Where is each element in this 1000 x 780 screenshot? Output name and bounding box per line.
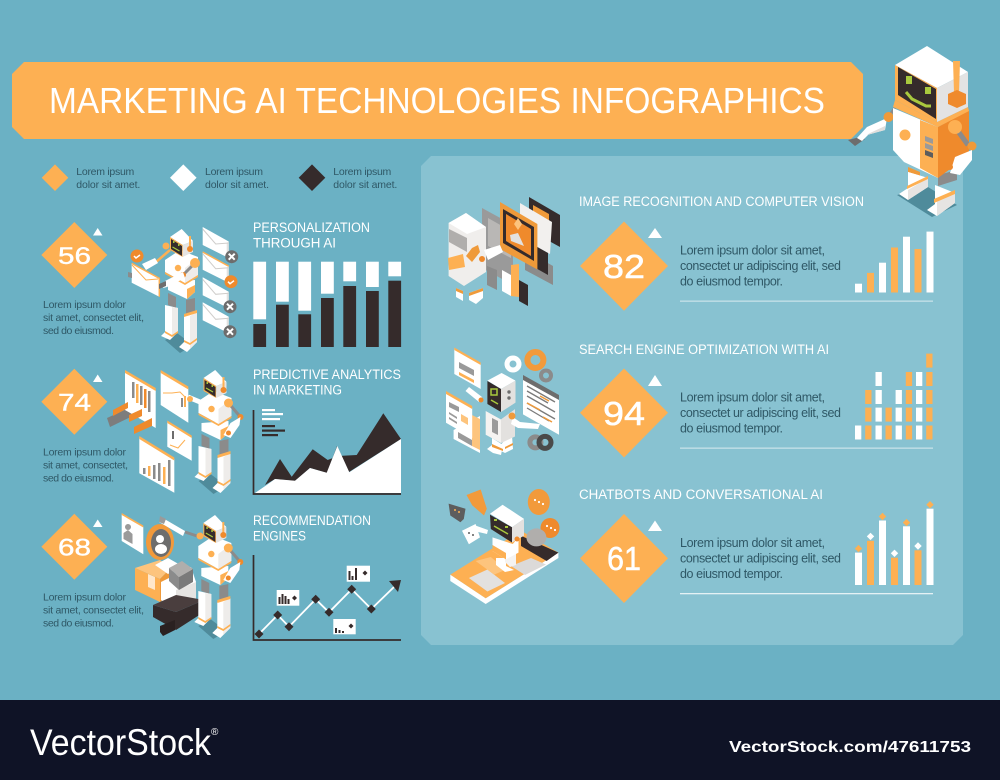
score badge 61: 61 — [607, 540, 641, 577]
bar chart with markers — [855, 501, 934, 585]
score badge 68 — [41, 514, 107, 580]
description: sed do eiusmod. — [43, 618, 114, 630]
description: sit amet, consectet, — [43, 460, 128, 472]
legend: dark: dolor sit amet. — [333, 179, 397, 191]
heading: PREDICTIVE ANALYTICS — [253, 367, 401, 382]
score badge 94: 94 — [603, 395, 645, 432]
description: Lorem ipsum dolor sit amet, — [680, 244, 825, 258]
legend — [42, 164, 397, 191]
score badge 61 — [580, 514, 668, 603]
section: chatbots — [449, 487, 934, 604]
legend: orange: Lorem ipsum — [76, 166, 135, 178]
icon: robot sorting email — [128, 227, 238, 353]
section: personalization — [41, 220, 401, 353]
heading: IMAGE RECOGNITION AND COMPUTER VISION — [579, 194, 864, 209]
section: image recognition — [448, 194, 934, 311]
score badge 82: 82 — [603, 248, 645, 285]
heading: ENGINES — [253, 528, 306, 544]
icon: robot on smartphone with chat bubbles — [449, 489, 560, 604]
score badge 56 — [41, 222, 107, 288]
icon: robot with analytics boards — [107, 370, 244, 494]
score badge 56: 56 — [58, 243, 91, 270]
icon: robot with vision screens — [448, 197, 560, 306]
description: sit amet, consectet elit, — [43, 312, 144, 324]
score badge 74: 74 — [58, 390, 91, 416]
score badge 82 — [580, 222, 668, 311]
heading: SEARCH ENGINE OPTIMIZATION WITH AI — [579, 342, 829, 357]
description: do eiusmod tempor. — [680, 567, 783, 581]
legend: white: Lorem ipsum — [205, 166, 263, 178]
score badge 68: 68 — [58, 534, 91, 562]
description: Lorem ipsum dolor — [43, 592, 126, 604]
heading: RECOMMENDATION — [253, 513, 371, 528]
area chart — [254, 409, 401, 494]
heading: PERSONALIZATION — [253, 220, 370, 235]
score badge 94 — [580, 368, 668, 458]
description: sed do eiusmod. — [43, 325, 114, 337]
bar chart — [855, 232, 934, 292]
heading: IN MARKETING — [253, 382, 342, 398]
line chart — [254, 555, 401, 640]
panel: right technologies — [421, 156, 963, 645]
footer logo: VectorStock — [30, 722, 211, 763]
title banner — [12, 62, 863, 139]
segmented bar chart — [855, 354, 932, 440]
description: do eiusmod tempor. — [680, 422, 783, 436]
legend: white — [170, 164, 269, 191]
description: Lorem ipsum dolor sit amet, — [680, 390, 825, 404]
section: search engine optimization — [446, 342, 933, 458]
section: predictive analytics — [41, 367, 405, 494]
description: Lorem ipsum dolor sit amet, — [680, 536, 825, 550]
icon: robot with documents and gears — [446, 348, 559, 455]
description: sed do eiusmod. — [43, 472, 114, 484]
description: Lorem ipsum dolor — [43, 299, 126, 311]
description: consectet ur adipiscing elit, sed — [680, 552, 841, 566]
description: do eiusmod tempor. — [680, 274, 783, 288]
score badge 74 — [41, 369, 107, 435]
section: recommendation engines — [41, 513, 401, 640]
footer — [0, 700, 1000, 780]
heading: CHATBOTS AND CONVERSATIONAL AI — [579, 487, 823, 502]
stacked bar chart — [253, 262, 401, 347]
legend: orange: dolor sit amet. — [76, 179, 140, 191]
legend: dark — [299, 164, 397, 191]
legend: orange — [42, 164, 140, 191]
registered mark: ® — [211, 727, 219, 738]
title: MARKETING AI TECHNOLOGIES INFOGRAPHICS — [49, 80, 825, 121]
legend: dark: Lorem ipsum — [333, 166, 392, 178]
description: consectet ur adipiscing elit, sed — [680, 406, 841, 420]
description: sit amet, consectet elit, — [43, 604, 144, 616]
icon: large robot pointing at title — [848, 46, 976, 217]
heading: THROUGH AI — [253, 236, 336, 251]
description: consectet ur adipiscing elit, sed — [680, 259, 841, 273]
description: Lorem ipsum dolor — [43, 446, 126, 458]
legend: white: dolor sit amet. — [205, 179, 269, 191]
icon: robot with product boxes — [122, 513, 243, 639]
footer image id: VectorStock.com/47611753 — [729, 739, 971, 756]
